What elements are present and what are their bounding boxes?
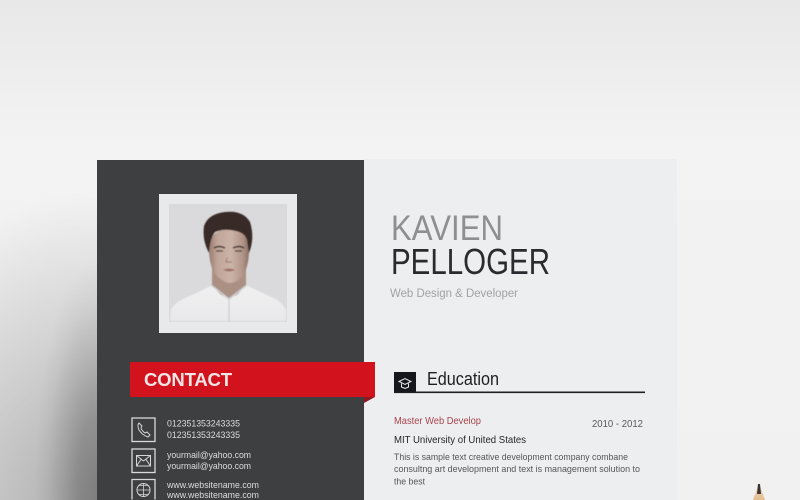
description: consultng art development and text is management solution to: [394, 464, 640, 474]
description: This is sample text creative development company combane: [394, 452, 628, 462]
job title: Web Design & Developer: [390, 288, 518, 300]
heading rule: [394, 392, 645, 393]
name heading: KAVIEN: [391, 209, 503, 248]
paper shadow: [0, 190, 97, 500]
section heading: Education: [427, 369, 499, 389]
description: [394, 452, 640, 486]
phone row: 012351353243335: [167, 430, 240, 441]
description: the best: [394, 476, 425, 486]
contact list: [132, 418, 259, 500]
contact ribbon: [130, 362, 375, 403]
education section: [394, 369, 645, 486]
phone row: [132, 418, 240, 442]
website row: [132, 480, 259, 500]
photo frame: [159, 194, 297, 333]
phone row: 012351353243335: [167, 418, 240, 430]
email row: yourmail@yahoo.com: [167, 461, 251, 472]
university: MIT University of United States: [394, 434, 526, 446]
name heading: PELLOGER: [391, 241, 550, 282]
email row: [132, 449, 251, 472]
icon: graduation cap: [394, 372, 416, 393]
dates: 2010 - 2012: [592, 418, 643, 430]
panel: resume right column: [364, 159, 677, 500]
contact ribbon: CONTACT: [144, 369, 233, 390]
icon: pencil tip: [753, 483, 765, 500]
portrait photo: [169, 204, 287, 322]
name heading: [391, 209, 550, 282]
degree: Master Web Develop: [394, 415, 481, 427]
panel: dark sidebar: [97, 160, 364, 500]
website row: www.websitename.com: [166, 480, 259, 491]
email row: yourmail@yahoo.com: [167, 450, 251, 461]
